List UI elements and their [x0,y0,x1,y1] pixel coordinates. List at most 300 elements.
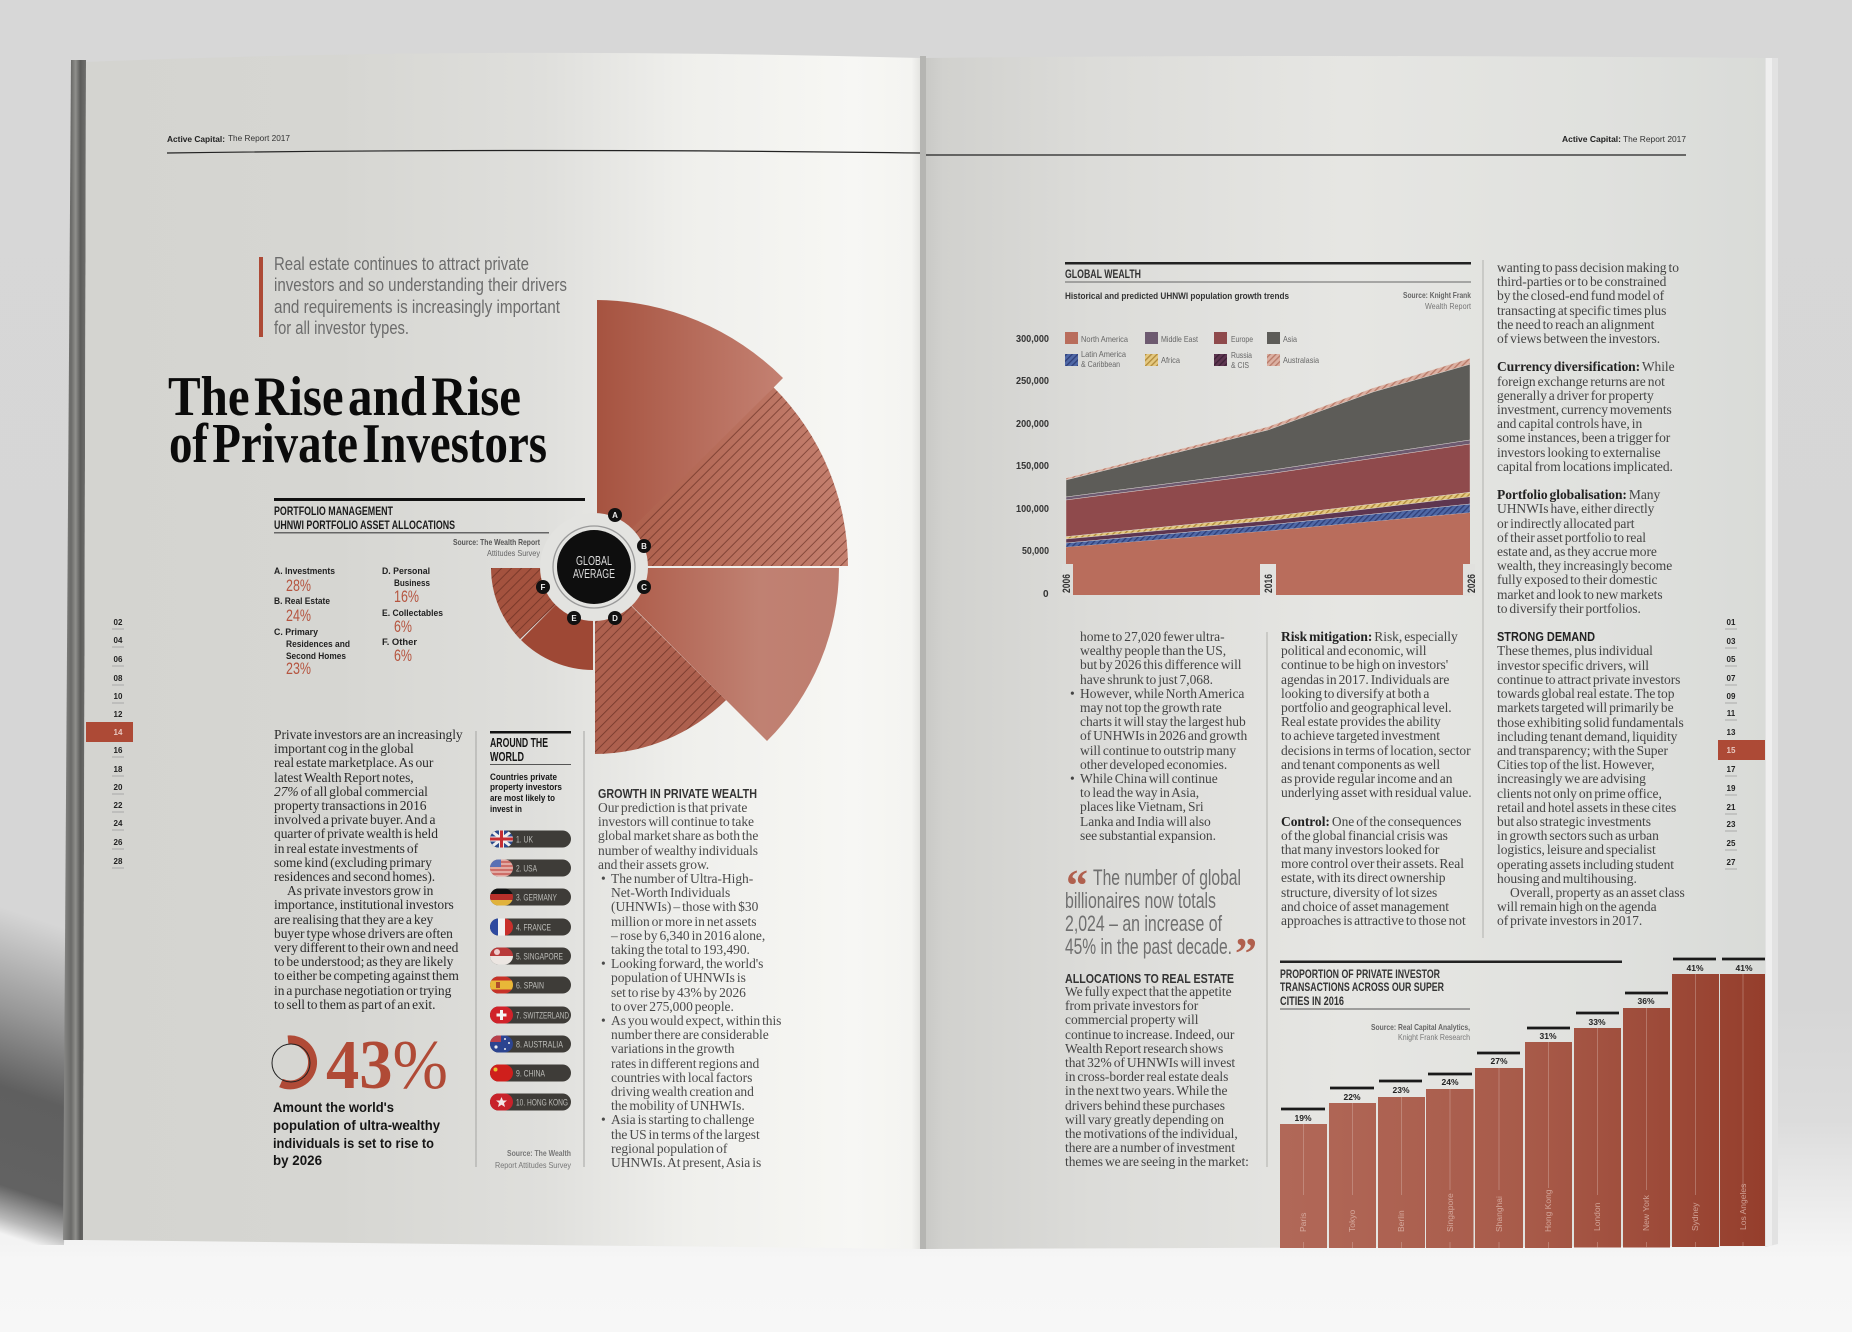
body text: intro: in a purchase negotiation or trying [274,983,451,998]
stat caption [273,1100,440,1168]
body text: right column C: wealth, they increasingly become [1497,558,1672,573]
body text: intro: to be understood; as they are likely [274,954,453,969]
body text: intro: residences and second homes). [274,869,435,884]
body text: right column C: those exhibiting solid fundamentals [1497,714,1684,730]
title: of Private Investors [169,413,547,475]
around the world heading: WORLD [490,750,524,764]
body text: growth intro: number of wealthy individuals [598,843,758,858]
strong demand heading: STRONG DEMAND [1497,630,1595,644]
page index right: 25 [1727,839,1736,848]
body text: intro: property transactions in 2016 [274,798,426,813]
body text: intro: to either be competing against them [274,968,459,983]
body text: right column C: investors looking to externalise [1497,445,1661,460]
body text: growth bullets: the mobility of UNHWIs. [611,1098,745,1113]
left page header [167,133,920,153]
body text: growth intro [598,800,758,872]
text: • [601,956,606,971]
body text: right column C: Currency diversification: While [1497,359,1675,374]
portfolio legend: A. Investments [274,566,335,576]
body text: right column C: of their asset portfolio to real [1497,530,1646,545]
body text: right column C: markets targeted will primarily be [1497,700,1674,715]
body text: right column C: the need to reach an alignment [1497,317,1654,332]
body text: intro [274,727,463,1012]
global wealth y axis: 250,000 [1016,376,1049,387]
body text: right column B: and tenant components as well [1281,757,1440,772]
body text: right column A: will continue to outstrip many [1080,743,1236,758]
page index left: 28 [114,857,123,866]
global wealth legend: Latin America [1081,349,1126,359]
column rules right page [1267,260,1483,1167]
portfolio panel heading: PORTFOLIO MANAGEMENT [274,504,393,518]
body text: growth bullets: Asia is starting to challenge [611,1112,754,1127]
around the world source: Report Attitudes Survey [495,1160,572,1170]
year cut-outs and labels: 2026 [1466,574,1478,593]
pill: Spain [490,976,571,994]
pill: Australia [490,1035,571,1053]
page index right: 19 [1727,784,1736,793]
global wealth legend: Africa [1161,355,1180,365]
body text: intro: latest Wealth Report notes, [274,770,414,785]
segment badges A-F: E [571,614,577,623]
body text: right column A: charts it will stay the largest hub [1080,714,1246,729]
portfolio legend: B. Real Estate [274,596,330,606]
body text: allocations [1065,984,1249,1169]
year cut-outs and labels: 2016 [1263,574,1275,593]
body text: growth bullets [601,871,781,1170]
body text: growth bullets: Looking forward, the world's [611,956,763,971]
body text: right column C: transacting at specific times plus [1497,303,1666,318]
pull quote: 2,024 – an increase of [1065,911,1223,936]
body text: growth bullets: Net-Worth Individuals [611,885,730,900]
page index right: 01 [1727,618,1736,627]
body text: right column C: of private investors in 2017. [1497,913,1642,928]
portfolio legend: F. Other [382,637,418,647]
bar percent labels: 33% [1588,1017,1606,1027]
body text: right column C: to diversify their portfolios. [1497,601,1641,616]
body text: right column A: While China will continue [1080,771,1218,786]
body text: intro: As private investors grow in [287,883,433,898]
page index left: 04 [114,636,123,645]
body text: right column C: UHNWIs have, either directly [1497,501,1654,516]
pull quote [1065,861,1257,978]
body text: right column A [1070,629,1248,843]
portfolio legend: 24% [286,606,311,625]
body text: growth bullets: million or more in net assets [611,914,756,929]
page index right: 05 [1727,655,1736,664]
stat caption: by 2026 [273,1153,322,1168]
body text: growth bullets: driving wealth creation and [611,1084,754,1099]
bar chart: super cities [1280,959,1765,1248]
body text: right column B: as provide regular income and an [1281,771,1452,786]
body text: right column A: to lead the way in Asia, [1080,785,1199,800]
around the world source: Source: The Wealth [507,1148,571,1158]
pill: Hong Kong [490,1093,571,1111]
body text: right column C: investment, currency movements [1497,402,1672,417]
segment badges A-F: B [641,542,647,551]
body text: right column C: will remain high on the agenda [1497,899,1657,914]
body text: right column B: Control: One of the consequences [1281,814,1461,829]
body text: right column B: decisions in terms of location, sector [1281,743,1471,758]
page index right: 21 [1727,803,1736,812]
body text: intro: importance, institutional investors [274,897,454,912]
body text: right column C: generally a driver for property [1497,388,1654,403]
bar percent labels: 19% [1294,1113,1312,1123]
body text: right column A: wealthy people than the US, [1080,643,1226,658]
portfolio legend: 23% [286,659,311,678]
page index right [1718,618,1765,869]
right page header: Active Capital: [1562,134,1621,144]
page index left: 18 [114,765,123,774]
body text: right column C: by the closed-end fund model of [1497,288,1664,303]
body text: right column A: However, while North America [1080,686,1244,701]
body text: right column A: Lanka and India will also [1080,814,1211,829]
portfolio legend: 16% [394,587,419,606]
body text: right column B: of the global financial crisis was [1281,828,1448,843]
body text: right column A: have shrunk to just 7,068. [1080,672,1213,687]
bar city labels: Paris [1298,1213,1308,1232]
standfirst quote [259,254,567,338]
body text: right column C: some instances, been a trigger for [1497,430,1670,445]
body text: right column C: continue to attract private investors [1497,672,1680,687]
left page header: Active Capital: [167,134,225,144]
page index left: 10 [114,692,123,701]
body text: right column B: to achieve targeted investment [1281,728,1440,743]
body text: growth bullets: countries with local factors [611,1070,752,1085]
body text: intro: Private investors are an increasingly [274,727,463,742]
column rules left page [476,731,584,1167]
bar city labels: Singapore [1445,1193,1455,1232]
page index left: 24 [114,819,123,828]
body text: right column A: see substantial expansion. [1080,828,1216,843]
page index right: 23 [1727,820,1736,829]
portfolio legend: Residences and [286,639,350,649]
around the world heading: property investors [490,782,562,792]
stat caption: Amount the world's [273,1100,394,1115]
global wealth legend: Middle East [1161,334,1199,344]
bar city labels: Tokyo [1347,1210,1357,1232]
stat: 43 percent: 43% [326,1027,448,1104]
body text: growth bullets: (UHNWIs) – those with $30 [611,899,758,914]
portfolio legend: 28% [286,576,311,595]
body text: right column C: Cities top of the list. However, [1497,757,1654,772]
body text: intro: 27% of all global commercial [274,784,428,799]
global wealth legend: North America [1081,334,1128,344]
body text: right column B: portfolio and geographical level. [1281,700,1452,715]
body text: intro: real estate marketplace. As our [274,755,433,770]
text: • [601,1112,606,1127]
bar city labels: New York [1641,1194,1651,1231]
global wealth y axis: 200,000 [1016,419,1049,430]
segment badges A-F: D [612,614,618,623]
body text: right column C: increasingly we are advising [1497,771,1646,786]
body text: right column C: wanting to pass decision making to [1497,260,1679,275]
left page [83,53,920,1249]
body text: growth bullets: regional population of [611,1141,727,1156]
portfolio legend [274,566,443,678]
pill: UK [490,830,571,848]
global wealth legend: & CIS [1231,360,1249,370]
stat: 43 percent [272,1027,448,1104]
body text: allocations: from private investors for [1065,998,1198,1013]
portfolio panel heading: UHNWI PORTFOLIO ASSET ALLOCATIONS [274,518,455,532]
body text: intro: important cog in the global [274,741,414,756]
pull quote: “ [1066,861,1088,910]
body text: growth intro: investors will continue to take [598,814,754,829]
body text: growth intro: and their assets grow. [598,857,709,872]
body text: right column A: but by 2026 this difference will [1080,657,1242,672]
pill: Germany: 3. GERMANY [516,892,557,904]
body text: allocations: that 32% of UHNWIs will invest [1065,1055,1235,1070]
body text: growth bullets: The number of Ultra-High- [611,871,753,886]
body text: right column C: estate and, as they accrue more [1497,544,1657,559]
body text: right column C: of views between the investors. [1497,331,1660,346]
body text: right column A: may not top the growth rate [1080,700,1222,715]
standfirst quote: and requirements is increasingly important [274,297,560,317]
body text: intro: are realising that they are a key [274,912,433,927]
page index left: 16 [114,746,123,755]
body text: allocations: We fully expect that the appetite [1065,984,1232,999]
standfirst quote: Real estate continues to attract private [274,254,529,274]
growth heading: GROWTH IN PRIVATE WEALTH [598,787,757,801]
pull quote: ” [1235,929,1257,978]
portfolio legend: Business [394,578,430,588]
around the world heading: invest in [490,804,522,814]
pill: UK: 1. UK [516,834,533,846]
body text: right column B: Real estate provides the ability [1281,714,1441,729]
gutter [920,56,926,1249]
body text: right column B: political and economic, will [1281,643,1426,658]
body text: growth bullets: taking the total to 193,490. [611,942,750,957]
body text: growth bullets: variations in the growth [611,1041,734,1056]
page index right: 13 [1727,728,1736,737]
body text: allocations: the motivations of the individual, [1065,1126,1238,1141]
centre label: global average: AVERAGE [573,567,615,581]
body text: allocations: in the next two years. While the [1065,1083,1227,1098]
body text: growth intro: Our prediction is that private [598,800,747,815]
text: • [601,1013,606,1028]
body text: right column B: looking to diversify at both a [1281,686,1429,701]
centre label: global average [553,526,635,608]
pull quote: billionaires now totals [1065,888,1216,913]
around the world heading: Countries private [490,772,557,782]
super cities heading: Knight Frank Research [1398,1032,1470,1042]
bar percent labels: 23% [1392,1085,1410,1095]
body text: right column C: capital from locations implicated. [1497,459,1673,474]
super cities heading: Source: Real Capital Analytics, [1371,1022,1470,1032]
global wealth heading: Historical and predicted UHNWI population growth trends [1065,291,1289,302]
bar city labels: Sydney [1690,1202,1700,1231]
bar city labels [1298,1184,1748,1232]
global wealth y axis: 100,000 [1016,504,1049,515]
body text: allocations: commercial property will [1065,1012,1198,1027]
body text: growth bullets: set to rise by 43% by 2026 [611,985,746,1000]
body text: right column B [1281,629,1472,928]
year cut-outs and labels [1061,564,1478,596]
body text: intro: very different to their own and need [274,940,458,955]
body text: allocations: will vary greatly depending on [1065,1112,1224,1127]
around the world heading [490,731,571,814]
global wealth heading: Wealth Report [1425,301,1472,311]
body text: right column B: and choice of asset management [1281,899,1449,914]
bar city labels: Los Angeles [1738,1184,1748,1230]
stat caption: individuals is set to rise to [273,1136,434,1151]
global wealth legend [1065,332,1319,370]
body text: allocations: in cross-border real estate deals [1065,1069,1228,1084]
portfolio panel heading [274,498,585,558]
segment badges A-F: C [641,583,647,592]
year cut-outs and labels: 2006 [1061,574,1073,593]
around the world source [495,1148,572,1170]
global wealth y axis: 50,000 [1022,546,1049,557]
super cities heading: PROPORTION OF PRIVATE INVESTOR [1280,967,1440,981]
page index left [86,618,133,868]
allocations heading: ALLOCATIONS TO REAL ESTATE [1065,972,1234,986]
bar percent labels: 41% [1686,963,1704,973]
global wealth legend: Australasia [1283,355,1319,365]
around the world heading: are most likely to [490,793,555,803]
body text: right column C: These themes, plus individual [1497,643,1653,658]
portfolio panel heading: Attitudes Survey [487,548,541,558]
portfolio legend: D. Personal [382,566,430,576]
body text: allocations: there are a number of investment [1065,1140,1235,1155]
radial chart: asset allocations [491,300,848,754]
page index left: 22 [114,801,123,810]
super cities heading: TRANSACTIONS ACROSS OUR SUPER [1280,980,1444,994]
page index left: 26 [114,838,123,847]
right page header [926,134,1686,155]
body text: right column C [1497,260,1685,928]
page index right: 27 [1727,858,1736,867]
body text: right column C: market and look to new markets [1497,587,1663,602]
segment badges A-F: A [612,511,618,520]
page index left: 14 [114,728,123,737]
pill: Australia: 8. AUSTRALIA [516,1040,563,1050]
right page header: The Report 2017 [1623,134,1686,144]
title [168,366,547,475]
page index right: 07 [1727,674,1736,683]
left page header: The Report 2017 [228,133,290,143]
page index right: 17 [1727,765,1736,774]
bar percent labels: 41% [1735,963,1753,973]
bar city labels: Shanghai [1494,1196,1504,1232]
pill: Spain: 6. SPAIN [516,980,544,992]
body text: right column C: in growth sectors such as urban [1497,828,1659,843]
body text: growth bullets: to over 275,000 people. [611,999,734,1014]
portfolio panel heading: Source: The Wealth Report [453,537,540,547]
portfolio legend: Second Homes [286,651,346,661]
body text: intro: buyer type whose drivers are often [274,926,453,941]
body text: growth bullets: As you would expect, within this [611,1013,781,1028]
body text: growth bullets: UHNWIs. At present, Asia is [611,1155,761,1170]
global wealth y axis [1016,334,1049,600]
pull quote: 45% in the past decade. [1065,934,1232,959]
bar percent labels: 27% [1490,1056,1508,1066]
body text: growth bullets: – rose by 6,340 in 2016 alone, [611,928,765,943]
body text: right column C: and transparency; with the Super [1497,743,1668,758]
text: • [601,871,606,886]
body text: growth bullets: population of UHNWIs is [611,970,746,985]
body text: right column C: and capital controls have, in [1497,416,1642,431]
global wealth y axis: 150,000 [1016,461,1049,472]
global wealth heading [1065,262,1472,311]
body text: intro: involved a private buyer. And a [274,812,435,827]
country pills [490,830,571,1111]
bar city labels: Berlin [1396,1210,1406,1232]
body text: right column B: approaches is attractive to those not [1281,913,1466,928]
pull quote: The number of global [1093,865,1241,890]
super cities heading: CITIES IN 2016 [1280,994,1344,1008]
bar percent labels [1294,963,1753,1123]
body text: allocations: continue to increase. Indeed, our [1065,1027,1234,1042]
stat caption: population of ultra-wealthy [273,1118,440,1133]
segment badges A-F [536,508,651,625]
body text: right column C: including tenant demand, liquidity [1497,729,1677,744]
body text: right column A: other developed economies. [1080,757,1227,772]
pill: China: 9. CHINA [516,1068,545,1080]
page index right: 11 [1727,709,1736,718]
body text: right column B: more control over their assets. Real [1281,856,1464,871]
body text: right column B: structure, diversity of lot sizes [1281,885,1437,900]
bar city labels: London [1592,1202,1602,1231]
body text: right column C: investor specific drivers, will [1497,658,1649,673]
bar value ticks [1281,959,1765,1109]
pill: USA: 2. USA [516,864,537,874]
bar percent labels: 31% [1539,1031,1557,1041]
body text: intro: quarter of private wealth is held [274,826,438,841]
centre label: global average: GLOBAL [576,554,612,568]
page index left: 20 [114,783,123,792]
body text: right column C: or indirectly allocated part [1497,516,1635,531]
body text: right column C: operating assets including student [1497,857,1674,872]
body text: right column C: towards global real estate. The top [1497,686,1674,701]
pill: Hong Kong: 10. HONG KONG [516,1098,568,1108]
right page [926,56,1765,1249]
global wealth legend: Europe [1231,334,1253,344]
body text: right column C: third-parties or to be constrained [1497,274,1666,289]
super cities heading [1280,960,1622,1042]
global wealth heading: Source: Knight Frank [1403,290,1471,300]
body text: growth bullets: the US in terms of the largest [611,1127,760,1142]
body text: right column B: continue to be high on investors' [1281,657,1448,672]
body text: right column A: home to 27,020 fewer ultra- [1080,629,1225,644]
global wealth legend: & Caribbean [1081,359,1120,369]
global wealth legend: Asia [1283,334,1297,344]
around the world heading: AROUND THE [490,736,548,750]
page index right: 15 [1727,746,1736,755]
body text: right column B: underlying asset with residual value. [1281,785,1472,800]
standfirst quote: for all investor types. [274,318,409,338]
text: • [1070,771,1075,786]
body text: right column C: logistics, leisure and specialist [1497,842,1656,857]
text: • [1070,686,1075,701]
portfolio legend: 6% [394,646,412,665]
portfolio legend: E. Collectables [382,608,443,618]
pill: Singapore: 5. SINGAPORE [516,952,563,962]
right page edge strip [1765,58,1778,1247]
body text: right column B: estate, with its direct ownership [1281,870,1446,885]
pill: China [490,1064,571,1082]
body text: growth intro: global market share as both the [598,828,758,843]
segment badges A-F: F [541,583,546,592]
body text: right column B: Risk mitigation: Risk, especially [1281,629,1458,644]
body text: intro: to sell to them as part of an exit. [274,997,435,1012]
body text: right column C: retail and hotel assets in these cites [1497,800,1676,815]
global wealth y axis: 300,000 [1016,334,1049,345]
body text: right column C: clients not only on prime office, [1497,786,1662,801]
body text: growth bullets: rates in different regions and [611,1056,759,1071]
bar percent labels: 36% [1637,996,1655,1006]
body text: right column B: agendas in 2017. Individuals are [1281,672,1449,687]
